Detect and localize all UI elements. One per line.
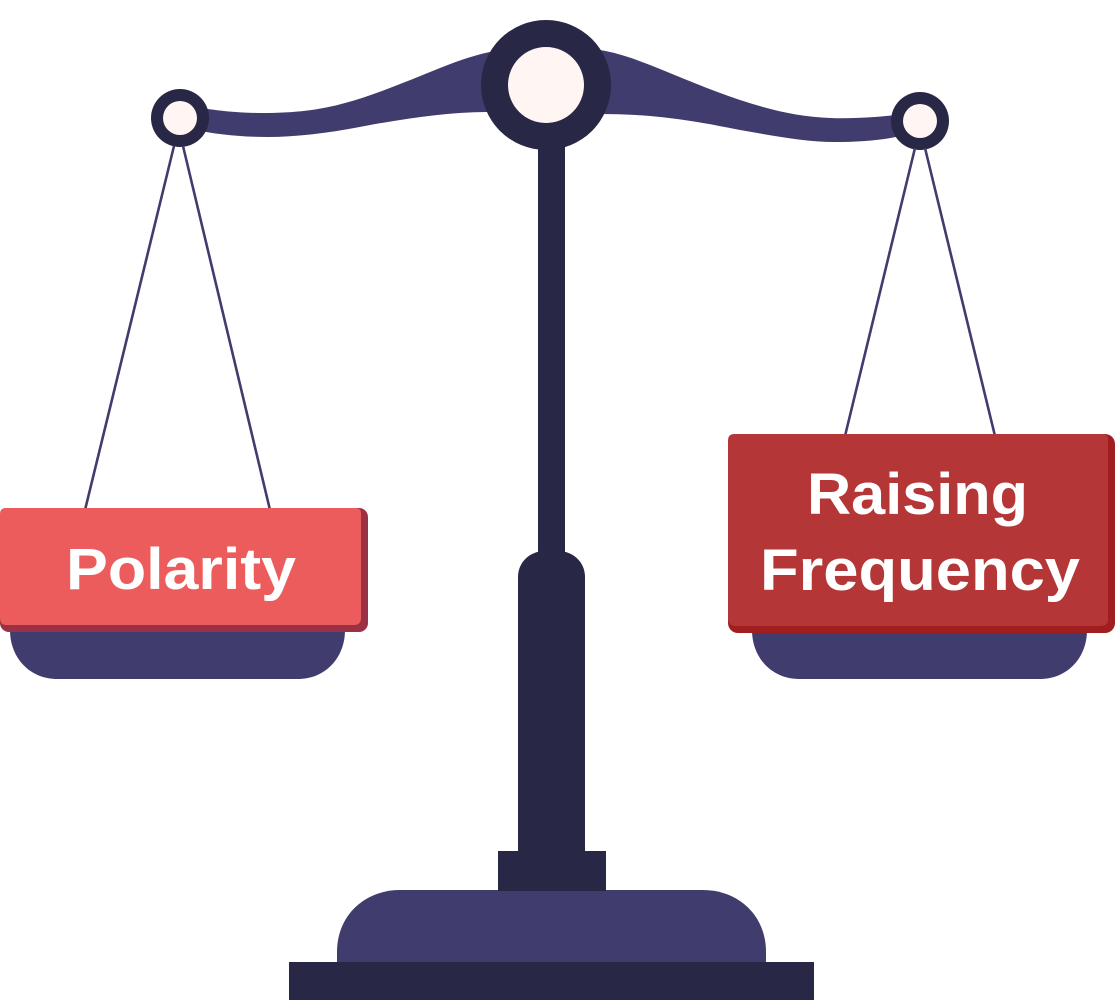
right pivot [891,92,949,150]
scale base [289,851,814,1000]
balance beam [195,50,905,142]
left pivot [151,89,209,147]
text: Raising Frequency [760,462,1080,603]
text: Raising Frequency: Frequency [760,538,1080,603]
label: Raising Frequency [728,434,1115,633]
text: Raising Frequency: Raising [807,462,1028,527]
text: Polarity: Polarity [66,537,296,602]
left pan [10,630,345,679]
right pan [752,630,1087,679]
label: Polarity [0,508,368,632]
left strings [85,146,270,510]
scale column [518,140,585,852]
right strings [845,148,995,436]
center pivot [481,20,611,150]
